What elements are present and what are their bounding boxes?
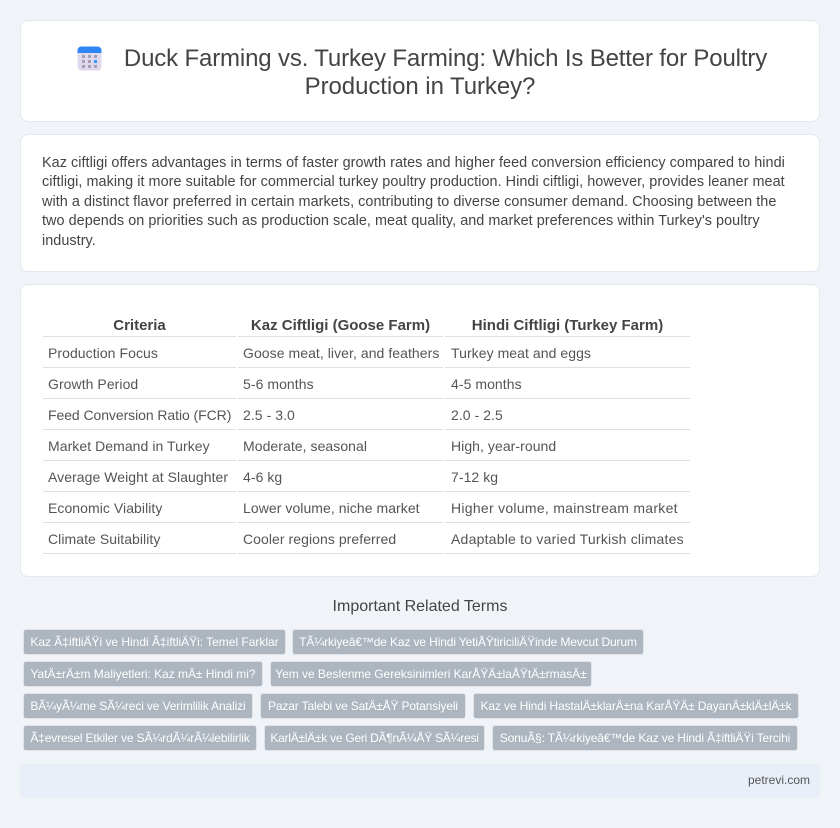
footer xyxy=(20,764,820,798)
table rows: Market Demand in Turkey xyxy=(48,438,210,454)
summary text: ciftligi, making it more suitable for commercial turkey poultry production. Hindi ciftligi, however, provides leaner meat xyxy=(42,174,785,190)
table rows: Higher volume, mainstream market xyxy=(451,500,678,516)
table rows: Turkey meat and eggs xyxy=(451,345,591,361)
heading: related terms: Important Related Terms xyxy=(333,598,507,615)
table rows: 7-12 kg xyxy=(451,469,498,485)
table rows: Lower volume, niche market xyxy=(243,500,420,516)
table rows: Climate Suitability xyxy=(48,531,160,547)
related term tags: Ã‡evresel Etkiler ve SÃ¼rdÃ¼rÃ¼lebilirlik xyxy=(30,731,250,745)
related term tags: BÃ¼yÃ¼me SÃ¼reci ve Verimlilik Analizi xyxy=(30,699,246,713)
table rows: 4-5 months xyxy=(451,376,522,392)
table rows: High, year-round xyxy=(451,438,556,454)
table rows xyxy=(43,336,690,554)
table rows: Goose meat, liver, and feathers xyxy=(243,345,439,361)
table rows: Adaptable to varied Turkish climates xyxy=(451,531,684,547)
summary text: with a distinct flavor preferred in certain markets, contributing to diverse consumer demand. Choosing between the xyxy=(42,194,776,210)
related term tags: Yem ve Beslenme Gereksinimleri KarÅŸÄ±laÅŸtÄ±rmasÄ± xyxy=(275,667,587,681)
title: Duck Farming vs. Turkey Farming: Which Is Better for Poultry xyxy=(124,45,767,72)
summary text: Kaz ciftligi offers advantages in terms of faster growth rates and higher feed conversion efficiency compared to hindi xyxy=(42,155,785,171)
related term tags xyxy=(23,629,799,751)
table headers: Criteria xyxy=(113,317,166,334)
table rows: Economic Viability xyxy=(48,500,162,516)
table headers: Kaz Ciftligi (Goose Farm) xyxy=(251,317,430,334)
table rows: Average Weight at Slaughter xyxy=(48,469,228,485)
summary text: industry. xyxy=(42,233,96,249)
table rows: 2.5 - 3.0 xyxy=(243,407,295,423)
related term tags: SonuÃ§: TÃ¼rkiyeâ€™de Kaz ve Hindi Ã‡iftliÄŸi Tercihi xyxy=(500,731,790,745)
panel: summary xyxy=(20,134,820,272)
related term tags: Kaz ve Hindi HastalÄ±klarÄ±na KarÅŸÄ± DayanÄ±klÄ±lÄ±k xyxy=(481,699,791,713)
table rows: Feed Conversion Ratio (FCR) xyxy=(48,407,231,423)
panel: comparison table xyxy=(20,284,820,577)
table headers xyxy=(113,317,663,334)
related term tags: Kaz Ã‡iftliÄŸi ve Hindi Ã‡iftliÄŸi: Temel Farklar xyxy=(30,635,279,649)
table rows: 2.0 - 2.5 xyxy=(451,407,503,423)
related term tags: Pazar Talebi ve SatÄ±ÅŸ Potansiyeli xyxy=(268,699,458,713)
title xyxy=(124,45,768,100)
table rows: Moderate, seasonal xyxy=(243,438,367,454)
table rows: 4-6 kg xyxy=(243,469,282,485)
related term tags: KarlÄ±lÄ±k ve Geri DÃ¶nÃ¼ÅŸ SÃ¼resi xyxy=(270,731,479,745)
panel: header xyxy=(20,20,820,122)
related term tags: YatÄ±rÄ±m Maliyetleri: Kaz mÄ± Hindi mi? xyxy=(30,667,256,681)
table rows: Cooler regions preferred xyxy=(243,531,396,547)
table rows: 5-6 months xyxy=(243,376,314,392)
summary text: two depends on priorities such as production scale, meat quality, and market preferences within Turkey's poultry xyxy=(42,213,760,229)
summary text xyxy=(42,155,785,249)
table rows: Growth Period xyxy=(48,376,138,392)
icon: calendar xyxy=(78,46,102,70)
related term tags: TÃ¼rkiyeâ€™de Kaz ve Hindi YetiÅŸtiriciliÄŸinde Mevcut Durum xyxy=(299,635,637,649)
table rows: Production Focus xyxy=(48,345,158,361)
table headers: Hindi Ciftligi (Turkey Farm) xyxy=(472,317,663,334)
footer source link: petrevi.com xyxy=(748,773,810,787)
title: Production in Turkey? xyxy=(305,73,535,100)
